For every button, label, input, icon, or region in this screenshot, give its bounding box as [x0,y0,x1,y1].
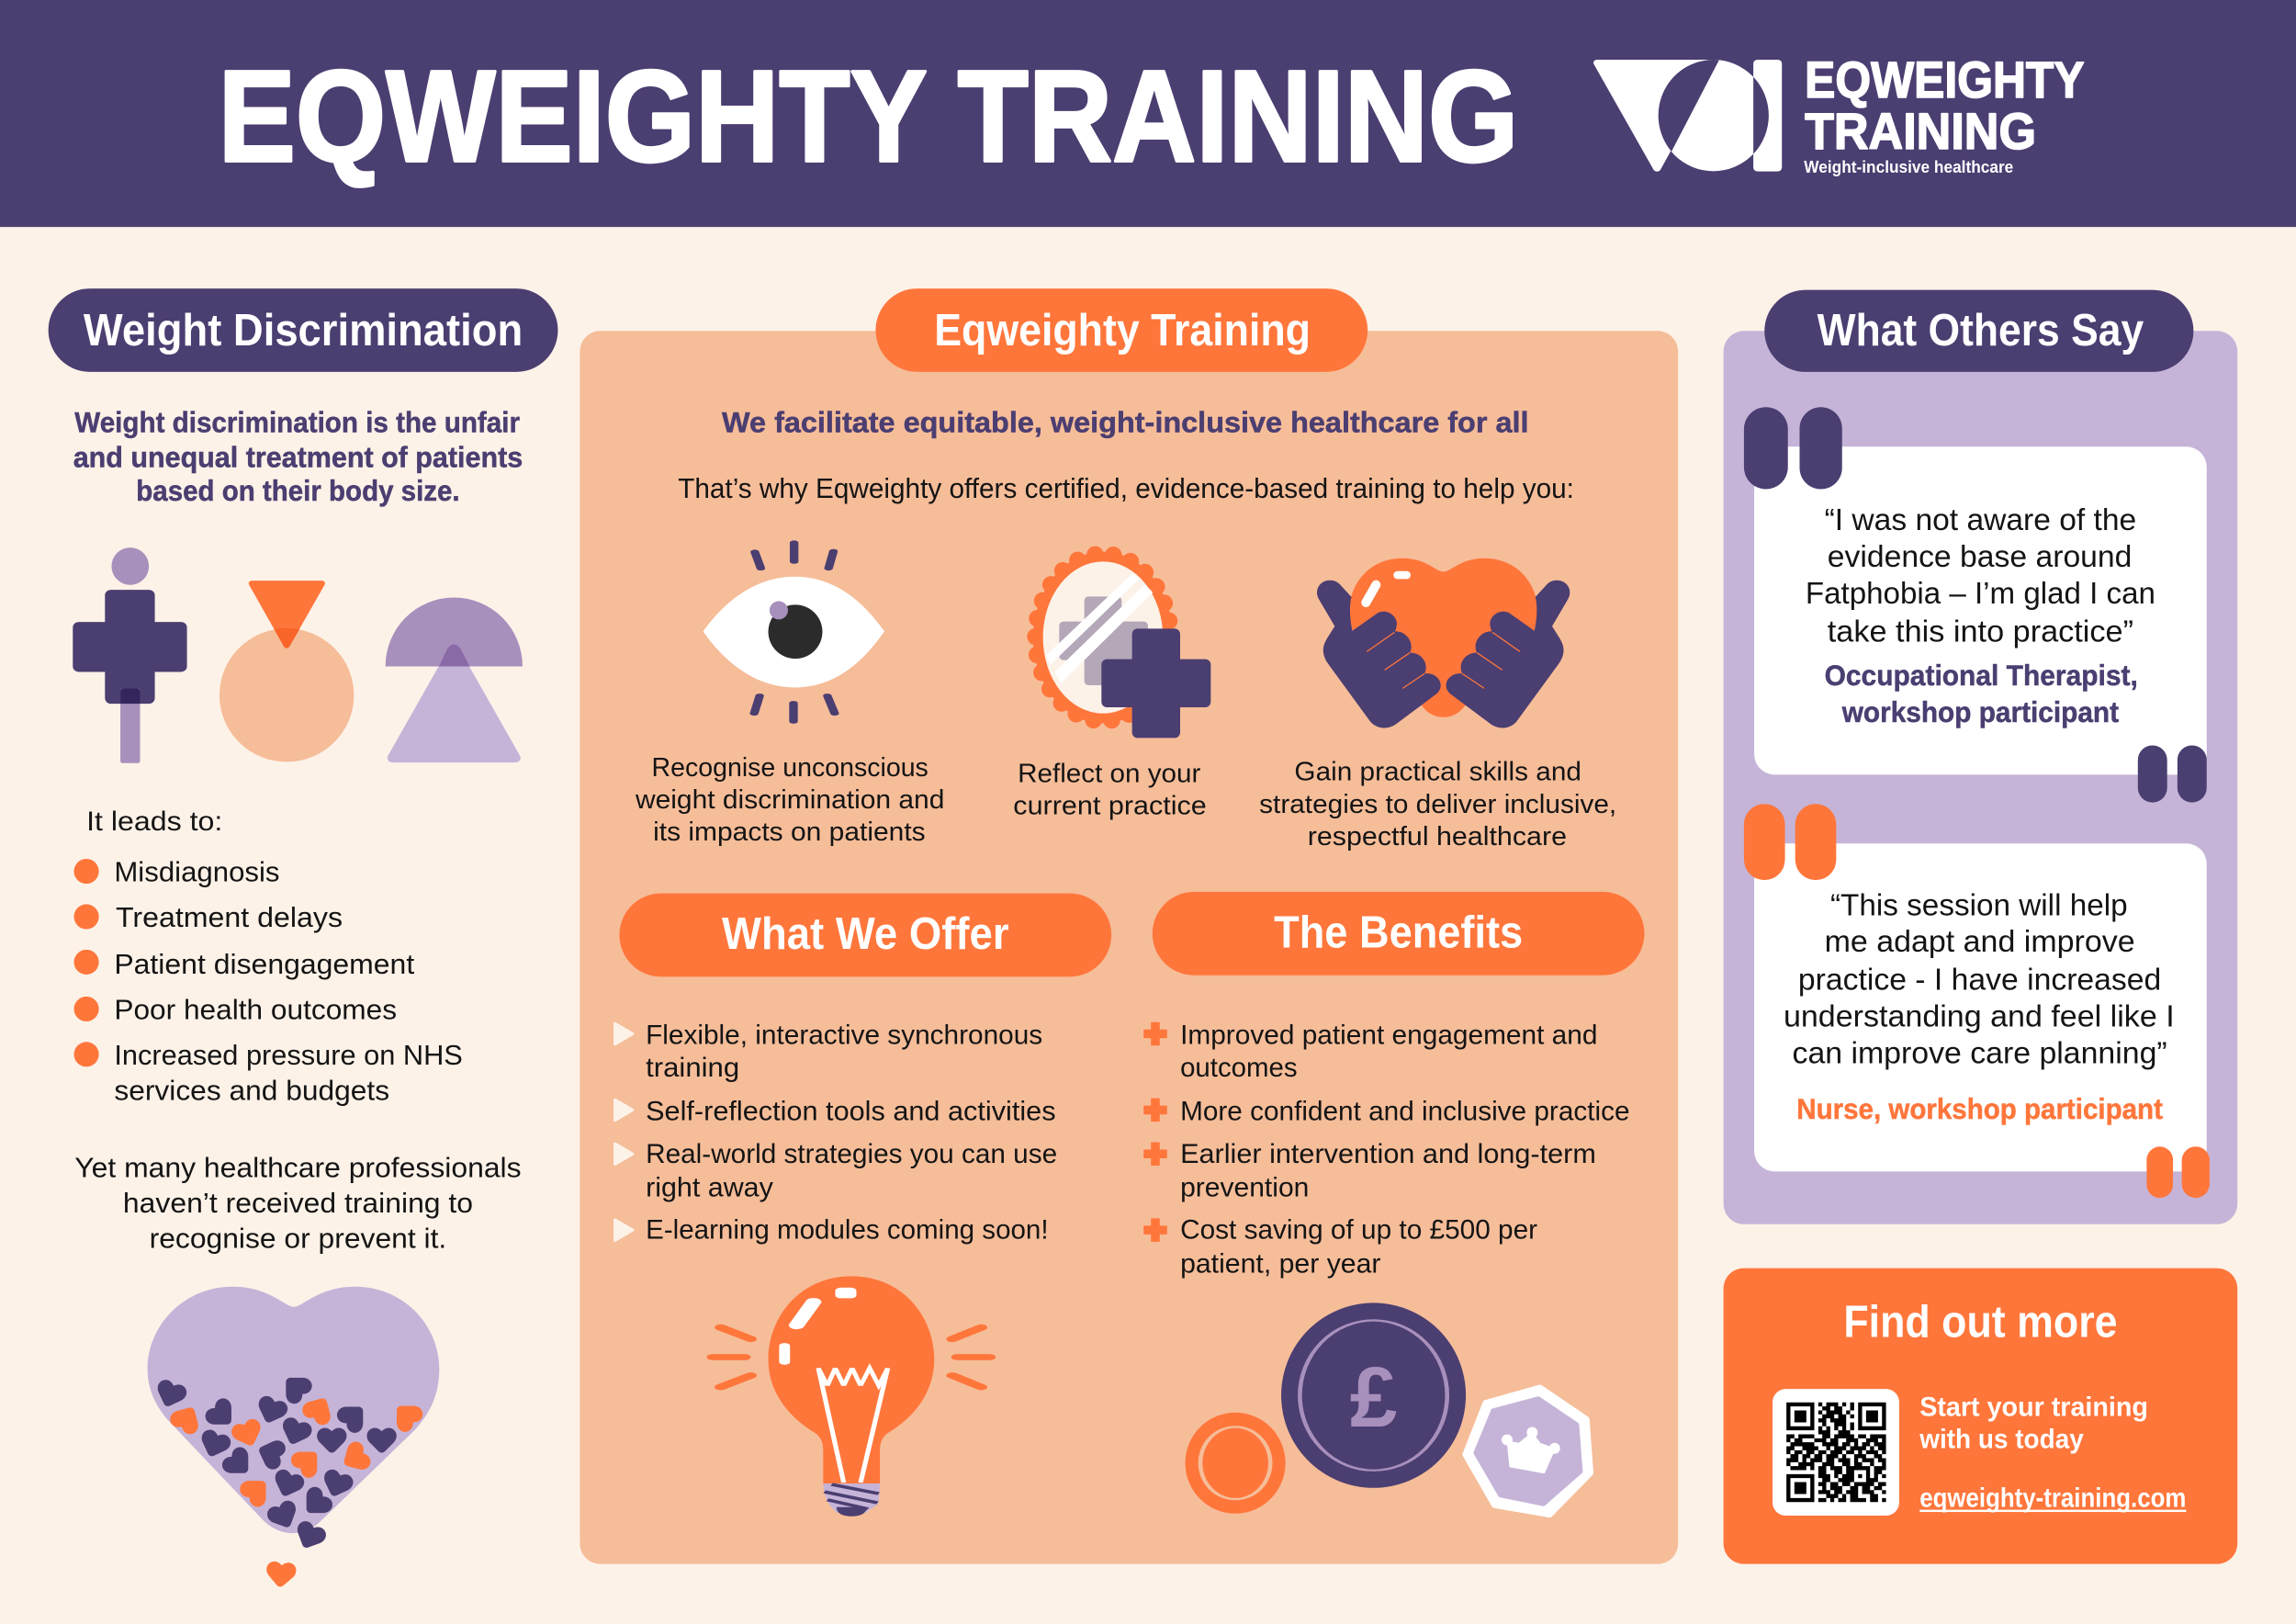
testimonial card 2: understanding and feel like I [1784,1000,2175,1034]
caption: reflect: current practice [1013,791,1207,820]
testimonial card 2: me adapt and improve [1825,925,2135,959]
heading pill: what we offer [619,893,1111,976]
panel: find out more [1724,1269,2237,1564]
list: the benefits: Earlier intervention and long-term [1180,1139,1596,1169]
logo [1597,51,2085,176]
list: what we offer: right away [646,1172,773,1202]
bullet list: consequences: services and budgets [114,1076,389,1106]
call to action text: eqweighty-training.com [1919,1483,2186,1513]
heading pill: eqweighty training [875,288,1367,372]
list: the benefits [1143,1021,1630,1279]
icon: heart with falling small hearts [148,1287,439,1588]
list: the benefits: patient, per year [1180,1248,1381,1279]
icon: light bulb [713,1276,990,1517]
list: what we offer: E-learning modules coming soon! [646,1215,1049,1246]
icon: hands holding heart [1317,558,1570,727]
text: training gap: haven’t received training to [123,1189,473,1219]
list: the benefits: Improved patient engagement and [1180,1021,1597,1051]
panel: eqweighty training [580,288,1678,1564]
bullet list: consequences [74,858,463,1106]
caption: gain skills: strategies to deliver inclusive, [1259,790,1616,819]
icon: eye [703,543,884,721]
caption: reflect: Reflect on your [1018,759,1201,788]
testimonial card 2 [1744,804,2210,1198]
heading pill: what others say: What Others Say [1818,305,2144,355]
bullet list: consequences: Misdiagnosis [114,858,280,888]
icon: abstract body shapes [73,547,523,763]
testimonial card 1: take this into practice” [1828,615,2133,648]
definition text: Weight discrimination is the unfair [74,405,520,438]
list: the benefits: outcomes [1180,1053,1298,1083]
heading pill: what others say [1764,290,2193,372]
list: what we offer: training [646,1053,739,1083]
definition text: based on their body size. [136,474,460,507]
testimonial card 1: Occupational Therapist, [1825,659,2138,692]
heading pill: eqweighty training: Eqweighty Training [934,305,1311,355]
icon: coins and badge [1186,1303,1591,1515]
panel: weight discrimination [49,288,557,1588]
logo: EQWEIGHTY [1805,51,2085,108]
qr code [1773,1389,1899,1516]
list: the benefits: More confident and inclusive practice [1180,1097,1630,1127]
text: training gap: recognise or prevent it. [150,1224,446,1254]
icon: mirror with medical cross [1033,552,1210,738]
header banner [0,0,2296,227]
caption: recognise [635,753,944,847]
bullet list: consequences: Patient disengagement [114,950,415,980]
list: what we offer: Flexible, interactive synchronous [646,1021,1042,1051]
list: what we offer: Self-reflection tools and activities [646,1097,1056,1127]
list: what we offer: Real-world strategies you can use [646,1139,1057,1169]
logo: Weight-inclusive healthcare [1804,157,2013,176]
icon: coins and badge: £ [1350,1349,1397,1445]
panel: what others say [1724,290,2237,1224]
testimonial card 1: evidence base around [1828,540,2132,574]
heading pill: the benefits [1153,892,1644,976]
testimonial card 2: “This session will help [1830,888,2128,922]
testimonial card 1: workshop participant [1841,695,2119,728]
list: what we offer [615,1021,1057,1246]
testimonial card 1 [1744,407,2207,803]
call to action text: with us today [1919,1425,2084,1455]
testimonial card 2: practice - I have increased [1798,964,2161,998]
list: the benefits: Cost saving of up to £500 per [1180,1215,1537,1246]
heading pill: what we offer: What We Offer [722,908,1009,959]
caption: gain skills [1259,758,1616,851]
heading pill: the benefits: The Benefits [1274,907,1523,957]
subheading: We facilitate equitable, weight-inclusive healthcare for all [722,405,1529,438]
bullet list: consequences: Poor health outcomes [114,996,397,1026]
text: training gap [74,1154,522,1254]
caption: recognise: weight discrimination and [635,785,944,815]
list: the benefits: prevention [1180,1172,1309,1202]
caption: recognise: Recognise unconscious [652,753,929,783]
heading: find out more: Find out more [1843,1297,2117,1348]
call to action text [1919,1393,2186,1513]
caption: gain skills: respectful healthcare [1308,822,1567,851]
title: EQWEIGHTY TRAINING [219,44,1518,189]
logo: TRAINING [1805,102,2036,160]
caption: reflect [1013,759,1207,820]
heading pill: weight discrimination: Weight Discrimination [84,305,523,355]
caption: recognise: its impacts on patients [653,818,926,847]
definition text [73,405,523,507]
testimonial card 1: “I was not aware of the [1825,503,2136,537]
testimonial card 2: Nurse, workshop participant [1796,1092,2163,1125]
definition text: and unequal treatment of patients [73,441,523,474]
call to action text: Start your training [1919,1393,2148,1423]
heading pill: weight discrimination [49,288,557,372]
caption: gain skills: Gain practical skills and [1294,758,1581,787]
testimonial card 1: Fatphobia – I’m glad I can [1806,577,2155,611]
text: it leads to: It leads to: [86,806,222,837]
bullet list: consequences: Increased pressure on NHS [114,1041,463,1071]
intro text: That’s why Eqweighty offers certified, evidence-based training to help you: [678,474,1574,504]
testimonial card 2: can improve care planning” [1793,1036,2167,1070]
bullet list: consequences: Treatment delays [116,903,343,933]
text: training gap: Yet many healthcare professionals [74,1154,522,1184]
